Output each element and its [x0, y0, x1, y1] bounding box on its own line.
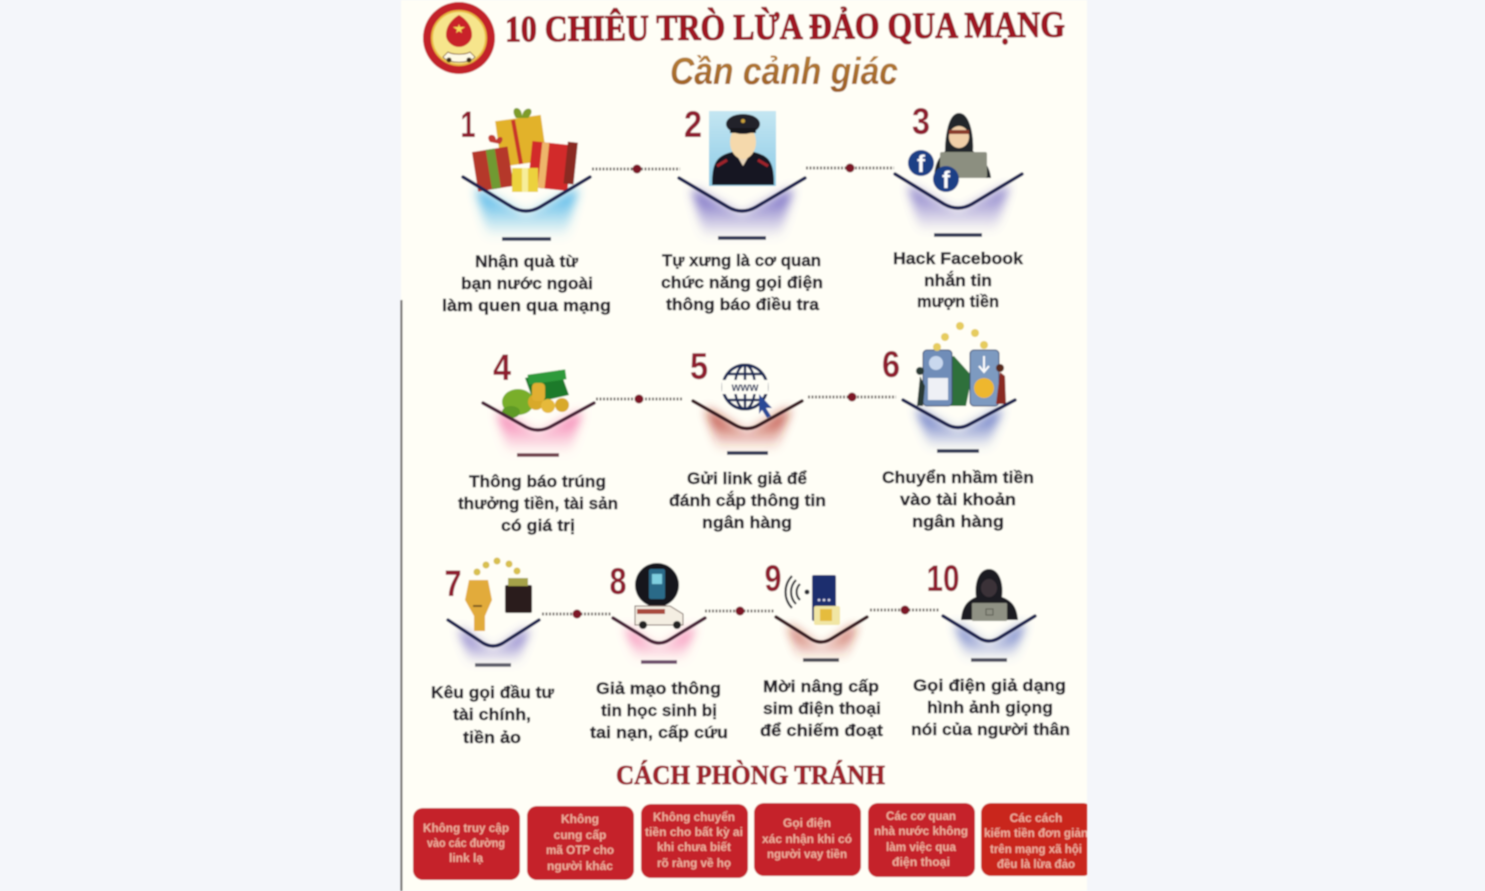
- logo emblem: [423, 2, 495, 74]
- tip 5: nhà nước không: [874, 824, 968, 838]
- item 9: sim upgrade: [760, 558, 883, 740]
- underline: [475, 663, 511, 667]
- caption 8: Giả mạo thông: [596, 679, 721, 698]
- poster left edge: [400, 300, 402, 891]
- item 4: prize money: [458, 347, 618, 535]
- icon: phone signal and sim card: [786, 575, 840, 625]
- caption 8: [590, 679, 728, 742]
- cradle: [943, 616, 1035, 641]
- caption 3: mượn tiền: [917, 292, 999, 311]
- number 8: 8: [610, 561, 626, 602]
- tip 6: [981, 803, 1093, 876]
- caption 2: chức năng gọi điện: [661, 273, 823, 292]
- caption 1: Nhận quà từ: [475, 252, 579, 271]
- caption 3: nhắn tin: [924, 271, 992, 290]
- caption 7: tiền ảo: [463, 728, 521, 747]
- caption 8: tin học sinh bị: [601, 701, 717, 720]
- tip 6: đều là lừa đảo: [997, 857, 1075, 871]
- caption 10: nói của người thân: [911, 720, 1070, 739]
- caption 10: hình ảnh giọng: [927, 698, 1053, 717]
- underline: [803, 658, 839, 662]
- caption 10: Gọi điện giả dạng: [913, 676, 1066, 695]
- connector 2 to 3: [806, 164, 894, 172]
- number 9: 9: [764, 558, 782, 599]
- caption 1: [442, 252, 611, 315]
- tip 1: link lạ: [449, 851, 483, 865]
- tip 5: điện thoại: [892, 855, 950, 869]
- underline: [971, 658, 1007, 662]
- tip 6: Các cách: [1010, 811, 1062, 825]
- icon: phones and coins: [916, 322, 1006, 406]
- caption 6: vào tài khoản: [900, 490, 1016, 509]
- poster background: [401, 0, 1087, 891]
- cradle: [463, 177, 590, 211]
- caption 9: để chiếm đoạt: [760, 721, 883, 740]
- cradle: [693, 401, 802, 428]
- caption 2: [661, 251, 823, 314]
- tip 1: Không truy cập: [423, 821, 509, 835]
- subtitle: Cần cảnh giác: [670, 51, 898, 93]
- underline: [517, 453, 559, 457]
- caption 6: ngân hàng: [912, 512, 1004, 531]
- item 3: hacked facebook: [893, 101, 1024, 311]
- number 4: 4: [493, 347, 511, 388]
- caption 1: làm quen qua mạng: [442, 296, 611, 315]
- tip 3: tiền cho bất kỳ ai: [645, 825, 743, 839]
- caption 4: thưởng tiền, tài sản: [458, 494, 618, 513]
- underline: [727, 451, 768, 455]
- number 7: 7: [444, 563, 462, 604]
- caption 2: thông báo điều tra: [666, 295, 820, 314]
- cradle: [903, 400, 1015, 428]
- tip 5: [868, 803, 975, 877]
- connector 5 to 6: [808, 392, 896, 402]
- item 2: officer: [661, 104, 823, 314]
- caption 8: tai nạn, cấp cứu: [590, 723, 728, 742]
- item 6: mistaken transfer: [882, 322, 1034, 531]
- tip 2: người khác: [547, 859, 613, 873]
- tip 3: [641, 804, 748, 878]
- caption 10: [911, 676, 1070, 739]
- icon: globe and cursor: www: [731, 382, 758, 394]
- prevention heading: CÁCH PHÒNG TRÁNH: [616, 760, 885, 790]
- tip 4: [754, 803, 861, 876]
- tip 6: kiếm tiền đơn giản: [984, 826, 1088, 840]
- caption 2: Tự xưng là cơ quan: [662, 251, 821, 270]
- caption 3: [893, 249, 1024, 311]
- underline: [934, 233, 982, 237]
- tip 1: [413, 808, 520, 880]
- item 5: fake link: [669, 346, 826, 532]
- icon: money and coins: [502, 369, 569, 418]
- number 1: 1: [460, 104, 476, 145]
- caption 5: ngân hàng: [702, 513, 792, 532]
- caption 9: Mời nâng cấp: [763, 677, 879, 696]
- tip 4: Gọi điện: [783, 816, 831, 830]
- item 8: fake student accident: [590, 561, 728, 742]
- tip 3: rõ ràng về họ: [657, 856, 731, 870]
- caption 4: Thông báo trúng: [469, 472, 606, 491]
- underline: [641, 660, 677, 664]
- tip 6: trên mạng xã hội: [990, 842, 1082, 856]
- caption 6: [882, 468, 1034, 531]
- tip 5: làm việc qua: [886, 840, 956, 854]
- caption 4: [458, 472, 618, 535]
- item 10: voice impersonation: [911, 558, 1070, 739]
- connector 4 to 5: [596, 394, 683, 404]
- caption 5: [669, 469, 826, 532]
- cradle: [483, 403, 594, 430]
- item 1: gifts: [442, 104, 611, 315]
- icon: hacker with facebook logos: f: [917, 151, 926, 178]
- caption 1: bạn nước ngoài: [461, 274, 593, 293]
- connector 7 to 8: [542, 610, 612, 618]
- caption 5: Gửi link giả để: [687, 469, 808, 488]
- icon: hacker with facebook logos: f: [942, 167, 951, 194]
- underline: [502, 237, 551, 241]
- tip 4: người vay tiền: [767, 847, 847, 861]
- icon: phone call and ambulance: [635, 563, 683, 629]
- prevention tips: [413, 803, 1093, 880]
- tip 5: Các cơ quan: [886, 809, 956, 823]
- tip 3: Không chuyển: [653, 810, 735, 824]
- number 5: 5: [690, 346, 708, 387]
- icon: hacker with facebook logos: [908, 113, 991, 194]
- tip 2: [527, 806, 634, 880]
- caption 5: đánh cắp thông tin: [669, 491, 826, 510]
- icon: hooded caller with laptop: [961, 569, 1018, 621]
- number 6: 6: [882, 344, 900, 385]
- caption 6: Chuyển nhầm tiền: [882, 468, 1034, 487]
- caption 3: Hack Facebook: [893, 249, 1024, 268]
- tip 2: Không: [561, 812, 599, 826]
- tip 3: khi chưa biết: [657, 840, 731, 854]
- connector 1 to 2: [592, 164, 680, 174]
- caption 7: tài chính,: [453, 705, 531, 724]
- number 3: 3: [912, 101, 930, 142]
- caption 7: [431, 683, 555, 747]
- cradle: [613, 618, 705, 643]
- cradle: [895, 174, 1022, 208]
- item 7: investment call: [431, 558, 555, 747]
- icon: gold hand and wallet: [465, 558, 532, 631]
- caption 9: sim điện thoại: [763, 699, 881, 718]
- title: 10 CHIÊU TRÒ LỪA ĐẢO QUA MẠNG: [505, 4, 1065, 50]
- icon: officer portrait: [709, 111, 776, 186]
- number 10: 10: [926, 558, 960, 599]
- cradle: [776, 617, 867, 642]
- underline: [718, 236, 766, 240]
- icon: globe and cursor: [722, 365, 772, 418]
- connector 9 to 10: [870, 606, 940, 614]
- caption 9: [760, 677, 883, 740]
- connector 8 to 9: [705, 606, 775, 616]
- caption 7: Kêu gọi đầu tư: [431, 683, 555, 702]
- icon: gift boxes: [472, 108, 578, 192]
- underline: [937, 449, 979, 453]
- tip 4: xác nhận khi có: [762, 832, 852, 846]
- cradle: [448, 620, 539, 646]
- cradle: [679, 178, 805, 211]
- tip 2: mã OTP cho: [546, 843, 614, 857]
- number 2: 2: [684, 104, 702, 145]
- caption 4: có giá trị: [501, 516, 575, 535]
- tip 1: vào các đường: [427, 836, 505, 850]
- infographic poster: [400, 0, 1088, 891]
- tip 2: cung cấp: [554, 828, 606, 842]
